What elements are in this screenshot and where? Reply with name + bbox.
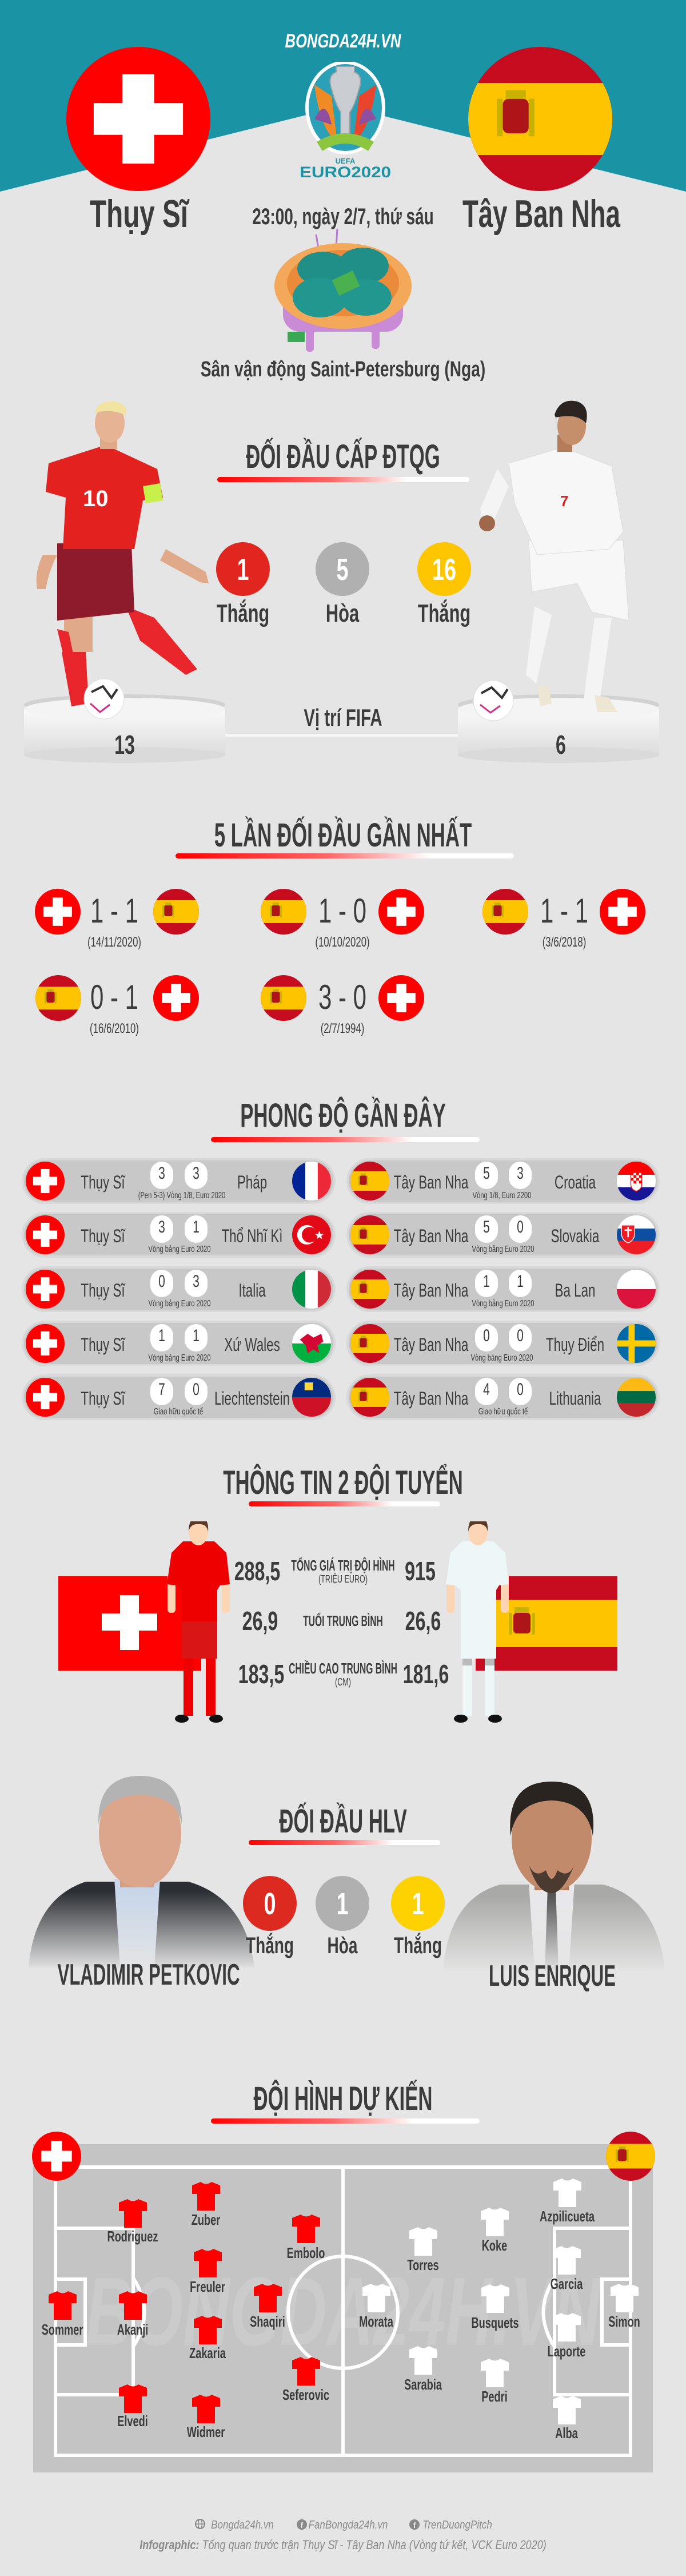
heading: THÔNG TIN 2 ĐỘI TUYỂN: THÔNG TIN 2 ĐỘI TUYỂN [223, 1464, 463, 1501]
row 3: Italia [238, 1280, 266, 1301]
team name: Tây Ban Nha: Tây Ban Nha [462, 192, 620, 236]
row 1: Vòng 1/8, Euro 2200 [473, 1191, 531, 1200]
FIFA ranking connector line [225, 734, 458, 737]
stats: coach head to head [243, 1876, 445, 1958]
row 1: 5 [483, 1164, 490, 1183]
illustration: Spain player and podium: 7 [560, 492, 568, 510]
row 3: Tây Ban Nha [394, 1280, 468, 1301]
heading underline [211, 2118, 480, 2124]
icon: globe [194, 2518, 206, 2531]
icon: facebook [296, 2519, 308, 2530]
row 4: Thụy Điển [546, 1334, 604, 1355]
stats: team comparison: CHIỀU CAO TRUNG BÌNH [289, 1660, 397, 1677]
team name: Thụy Sĩ: Thụy Sĩ [90, 192, 188, 236]
row 4: Xứ Wales [224, 1334, 280, 1355]
lineup player names: Embolo [287, 2244, 325, 2261]
label: Vị trí FIFA: Vị trí FIFA [304, 704, 382, 731]
row 3: Ba Lan [555, 1280, 595, 1301]
lineup player names: Elvedi [117, 2412, 148, 2430]
lineup player names: Zakaria [189, 2344, 226, 2362]
lineup player names: Sarabia [404, 2376, 442, 2393]
lineup player names: Widmer [187, 2423, 225, 2440]
lineup player names: Pedri [481, 2388, 508, 2405]
stats: head to head circles: 5 [336, 552, 349, 587]
heading underline [211, 1137, 480, 1142]
lineup player names: Azpilicueta [540, 2208, 595, 2225]
row 2: Slovakia [551, 1226, 599, 1246]
stats: head to head circles [216, 542, 471, 627]
row 3: 0 [158, 1272, 165, 1291]
section: head to head national teams [24, 400, 659, 763]
row 4: Vòng bảng Euro 2020 [471, 1353, 533, 1363]
stats: coach head to head: Thắng [394, 1933, 442, 1958]
row 2: Vòng bảng Euro 2020 [149, 1245, 210, 1254]
stats: head to head circles: Thắng [217, 599, 269, 627]
lineup player names: Zuber [192, 2211, 220, 2228]
row 2 [81, 1218, 599, 1254]
stats: team comparison: (CM) [335, 1676, 351, 1688]
footer: social links [194, 2517, 497, 2534]
footer: social links: TrenDuongPitch [422, 2519, 492, 2531]
row 1: (Pen 5-3) Vòng 1/8, Euro 2020 [138, 1191, 225, 1200]
row 1: Pháp [237, 1172, 267, 1192]
row 1: Croatia [555, 1172, 596, 1192]
row 3: Thụy Sĩ [81, 1280, 125, 1301]
stats: team comparison [234, 1556, 449, 1689]
lineup player names: Busquets [472, 2314, 519, 2331]
stats: coach head to head: Thắng [246, 1933, 294, 1958]
panel: team info graphics [58, 1521, 617, 1723]
lineup player names: Rodriguez [107, 2228, 158, 2245]
row 5: 7 [158, 1380, 165, 1399]
heading: ĐỐI ĐẦU HLV: ĐỐI ĐẦU HLV [279, 1803, 407, 1840]
match 5 [261, 975, 424, 1036]
footer: infographic caption: Infographic: Tổng quan trước trận Thụy Sĩ - Tây Ban Nha (Vòng tứ kết, VCK Euro 2020) [139, 2538, 547, 2552]
match 1: (14/11/2020) [87, 935, 141, 950]
row 2: Thụy Sĩ [81, 1226, 125, 1246]
match 3: 1 - 1 [540, 892, 588, 930]
stats: coach head to head: 1 [336, 1887, 349, 1921]
stadium label: Sân vận động Saint-Petersburg (Nga) [201, 357, 485, 381]
row 5: Giao hữu quốc tế [154, 1407, 203, 1417]
row 4: 1 [193, 1326, 200, 1345]
lineup player names: Morata [359, 2313, 393, 2330]
coach name: Luis Enrique: LUIS ENRIQUE [489, 1959, 616, 1993]
match 1 [35, 889, 199, 950]
header background [0, 0, 686, 192]
lineup player names: Garcia [551, 2275, 583, 2292]
coach name: Vladimir Petkovic: VLADIMIR PETKOVIC [58, 1958, 240, 1991]
stats: team comparison: TỔNG GIÁ TRỊ ĐỘI HÌNH [291, 1557, 395, 1574]
match 4 [35, 975, 199, 1036]
panel: last 5 meetings [35, 889, 645, 1036]
logo: Euro 2020 [300, 62, 391, 179]
stats: team comparison: (TRIỆU EURO) [318, 1573, 368, 1585]
lineup player names: Freuler [190, 2278, 225, 2295]
stats: team comparison: 288,5 [234, 1556, 280, 1586]
icon: facebook: f [301, 2521, 304, 2530]
row 5 [81, 1380, 601, 1417]
heading underline [249, 1501, 440, 1506]
stats: head to head circles: Thắng [418, 599, 470, 627]
stats: head to head circles: 16 [432, 552, 456, 587]
row 3: 3 [193, 1272, 200, 1291]
stats: head to head circles: 1 [237, 552, 249, 587]
icon: stadium [274, 229, 412, 352]
row 5: 4 [483, 1380, 490, 1399]
icon: facebook: f [413, 2521, 416, 2530]
circle: draws [316, 542, 369, 596]
lineup player names: Shaqiri [250, 2313, 285, 2330]
heading: 5 LẦN ĐỐI ĐẦU GẦN NHẤT: 5 LẦN ĐỐI ĐẦU GẦN NHẤT [214, 817, 472, 854]
lineup player names: Torres [407, 2256, 439, 2273]
row 5: Lithuania [549, 1388, 601, 1409]
row 1: Tây Ban Nha [394, 1172, 468, 1192]
circle: Spain wins [417, 542, 471, 596]
row 5: 0 [517, 1380, 524, 1399]
heading underline [176, 853, 514, 858]
FIFA rank: Spain: 6 [556, 730, 566, 760]
match 4: (16/6/2010) [90, 1021, 139, 1036]
row 3: 1 [483, 1272, 490, 1291]
stats: head to head circles: Hòa [326, 599, 359, 627]
FIFA rank: Switzerland: 13 [114, 730, 135, 760]
lineup player names: Seferovic [282, 2386, 329, 2403]
lineup player names: Alba [555, 2424, 578, 2442]
row 4: Vòng bảng Euro 2020 [149, 1353, 210, 1363]
row 3 [81, 1272, 595, 1309]
stats: team comparison: 26,9 [242, 1606, 278, 1636]
lineup player names: Laporte [548, 2343, 585, 2360]
match 2 [261, 889, 424, 950]
footer: social links: FanBongda24h.vn [309, 2519, 388, 2531]
stats: team comparison: 183,5 [238, 1659, 284, 1689]
match 3 [482, 889, 645, 950]
heading: ĐỘI HÌNH DỰ KIẾN: ĐỘI HÌNH DỰ KIẾN [253, 2080, 433, 2117]
illustration: Spain player and podium [458, 400, 659, 763]
row 5: Giao hữu quốc tế [478, 1407, 528, 1417]
row 2: Tây Ban Nha [394, 1226, 468, 1246]
row 5: Liechtenstein [214, 1388, 290, 1409]
row 4: 1 [158, 1326, 165, 1345]
panel: recent form [22, 1158, 660, 1420]
form texts [81, 1164, 604, 1417]
photo: Vladimir Petkovic [29, 1776, 254, 1967]
row 1: 3 [158, 1164, 165, 1183]
stats: team comparison: 915 [405, 1556, 436, 1586]
match 5: (2/7/1994) [321, 1021, 364, 1036]
stats: team comparison: TUỔI TRUNG BÌNH [303, 1612, 383, 1629]
match 1: 1 - 1 [90, 892, 138, 930]
lineup player names [0, 2128, 686, 2448]
heading underline [249, 1840, 440, 1845]
panel: lineup pitch [0, 2128, 686, 2482]
row 3: 1 [517, 1272, 524, 1291]
stats: team comparison: 26,6 [405, 1606, 441, 1636]
match 3: (3/6/2018) [543, 935, 586, 950]
row 4: 0 [517, 1326, 524, 1345]
match 2: (10/10/2020) [315, 935, 370, 950]
match 2: 1 - 0 [318, 892, 366, 930]
match time: 23:00, ngày 2/7, thứ sáu [252, 204, 434, 229]
row 4: 0 [483, 1326, 490, 1345]
row 2: Thổ Nhĩ Kì [221, 1226, 283, 1246]
heading underline [217, 477, 469, 482]
row 1: 3 [517, 1164, 524, 1183]
row 3: Vòng bảng Euro 2020 [472, 1299, 534, 1309]
row 4: Thụy Sĩ [81, 1334, 125, 1355]
row 5: Thụy Sĩ [81, 1388, 125, 1409]
logo: Bongda24h: BONGDA24H.VN [285, 30, 401, 52]
row 5: 0 [193, 1380, 200, 1399]
row 1: 3 [193, 1164, 200, 1183]
row 1 [81, 1164, 596, 1200]
match 4: 0 - 1 [90, 978, 138, 1016]
illustration: Swiss player and podium [24, 401, 225, 763]
row 5: Tây Ban Nha [394, 1388, 468, 1409]
circle: Petkovic wins [243, 1876, 297, 1931]
lineup player names: Koke [482, 2237, 507, 2254]
heading: PHONG ĐỘ GẦN ĐÂY: PHONG ĐỘ GẦN ĐÂY [240, 1097, 446, 1134]
icon: facebook [409, 2519, 420, 2530]
row 2: 5 [483, 1218, 490, 1237]
stats: coach head to head: 1 [412, 1887, 424, 1921]
row 2: Vòng bảng Euro 2020 [472, 1245, 534, 1254]
flag: Switzerland large [66, 47, 210, 191]
circle: Swiss wins [216, 542, 270, 596]
illustration: Swiss player and podium: 10 [83, 486, 109, 511]
row 2: 3 [158, 1218, 165, 1237]
stats: team comparison: 181,6 [403, 1659, 449, 1689]
row 3: Vòng bảng Euro 2020 [149, 1299, 210, 1309]
match 5: 3 - 0 [318, 978, 366, 1016]
row 2: 1 [193, 1218, 200, 1237]
circle: Enrique wins [391, 1876, 445, 1931]
row 4 [81, 1326, 604, 1363]
heading: ĐỐI ĐẦU CẤP ĐTQG: ĐỐI ĐẦU CẤP ĐTQG [246, 438, 440, 475]
row 4: Tây Ban Nha [394, 1334, 468, 1355]
stats: coach head to head: Hòa [328, 1933, 357, 1958]
lineup player names: Sommer [42, 2321, 83, 2338]
stats: coach head to head: 0 [264, 1887, 276, 1921]
footer: social links: Bongda24h.vn [211, 2519, 274, 2531]
lineup player names: Simon [608, 2313, 640, 2330]
row 1: Thụy Sĩ [81, 1172, 125, 1192]
flag: Spain large [468, 47, 612, 191]
photo: Luis Enrique [444, 1782, 664, 1969]
circle: draws [316, 1876, 369, 1931]
row 2: 0 [517, 1218, 524, 1237]
lineup player names: Akanji [117, 2321, 148, 2338]
logo: Euro 2020: UEFA [336, 157, 356, 165]
